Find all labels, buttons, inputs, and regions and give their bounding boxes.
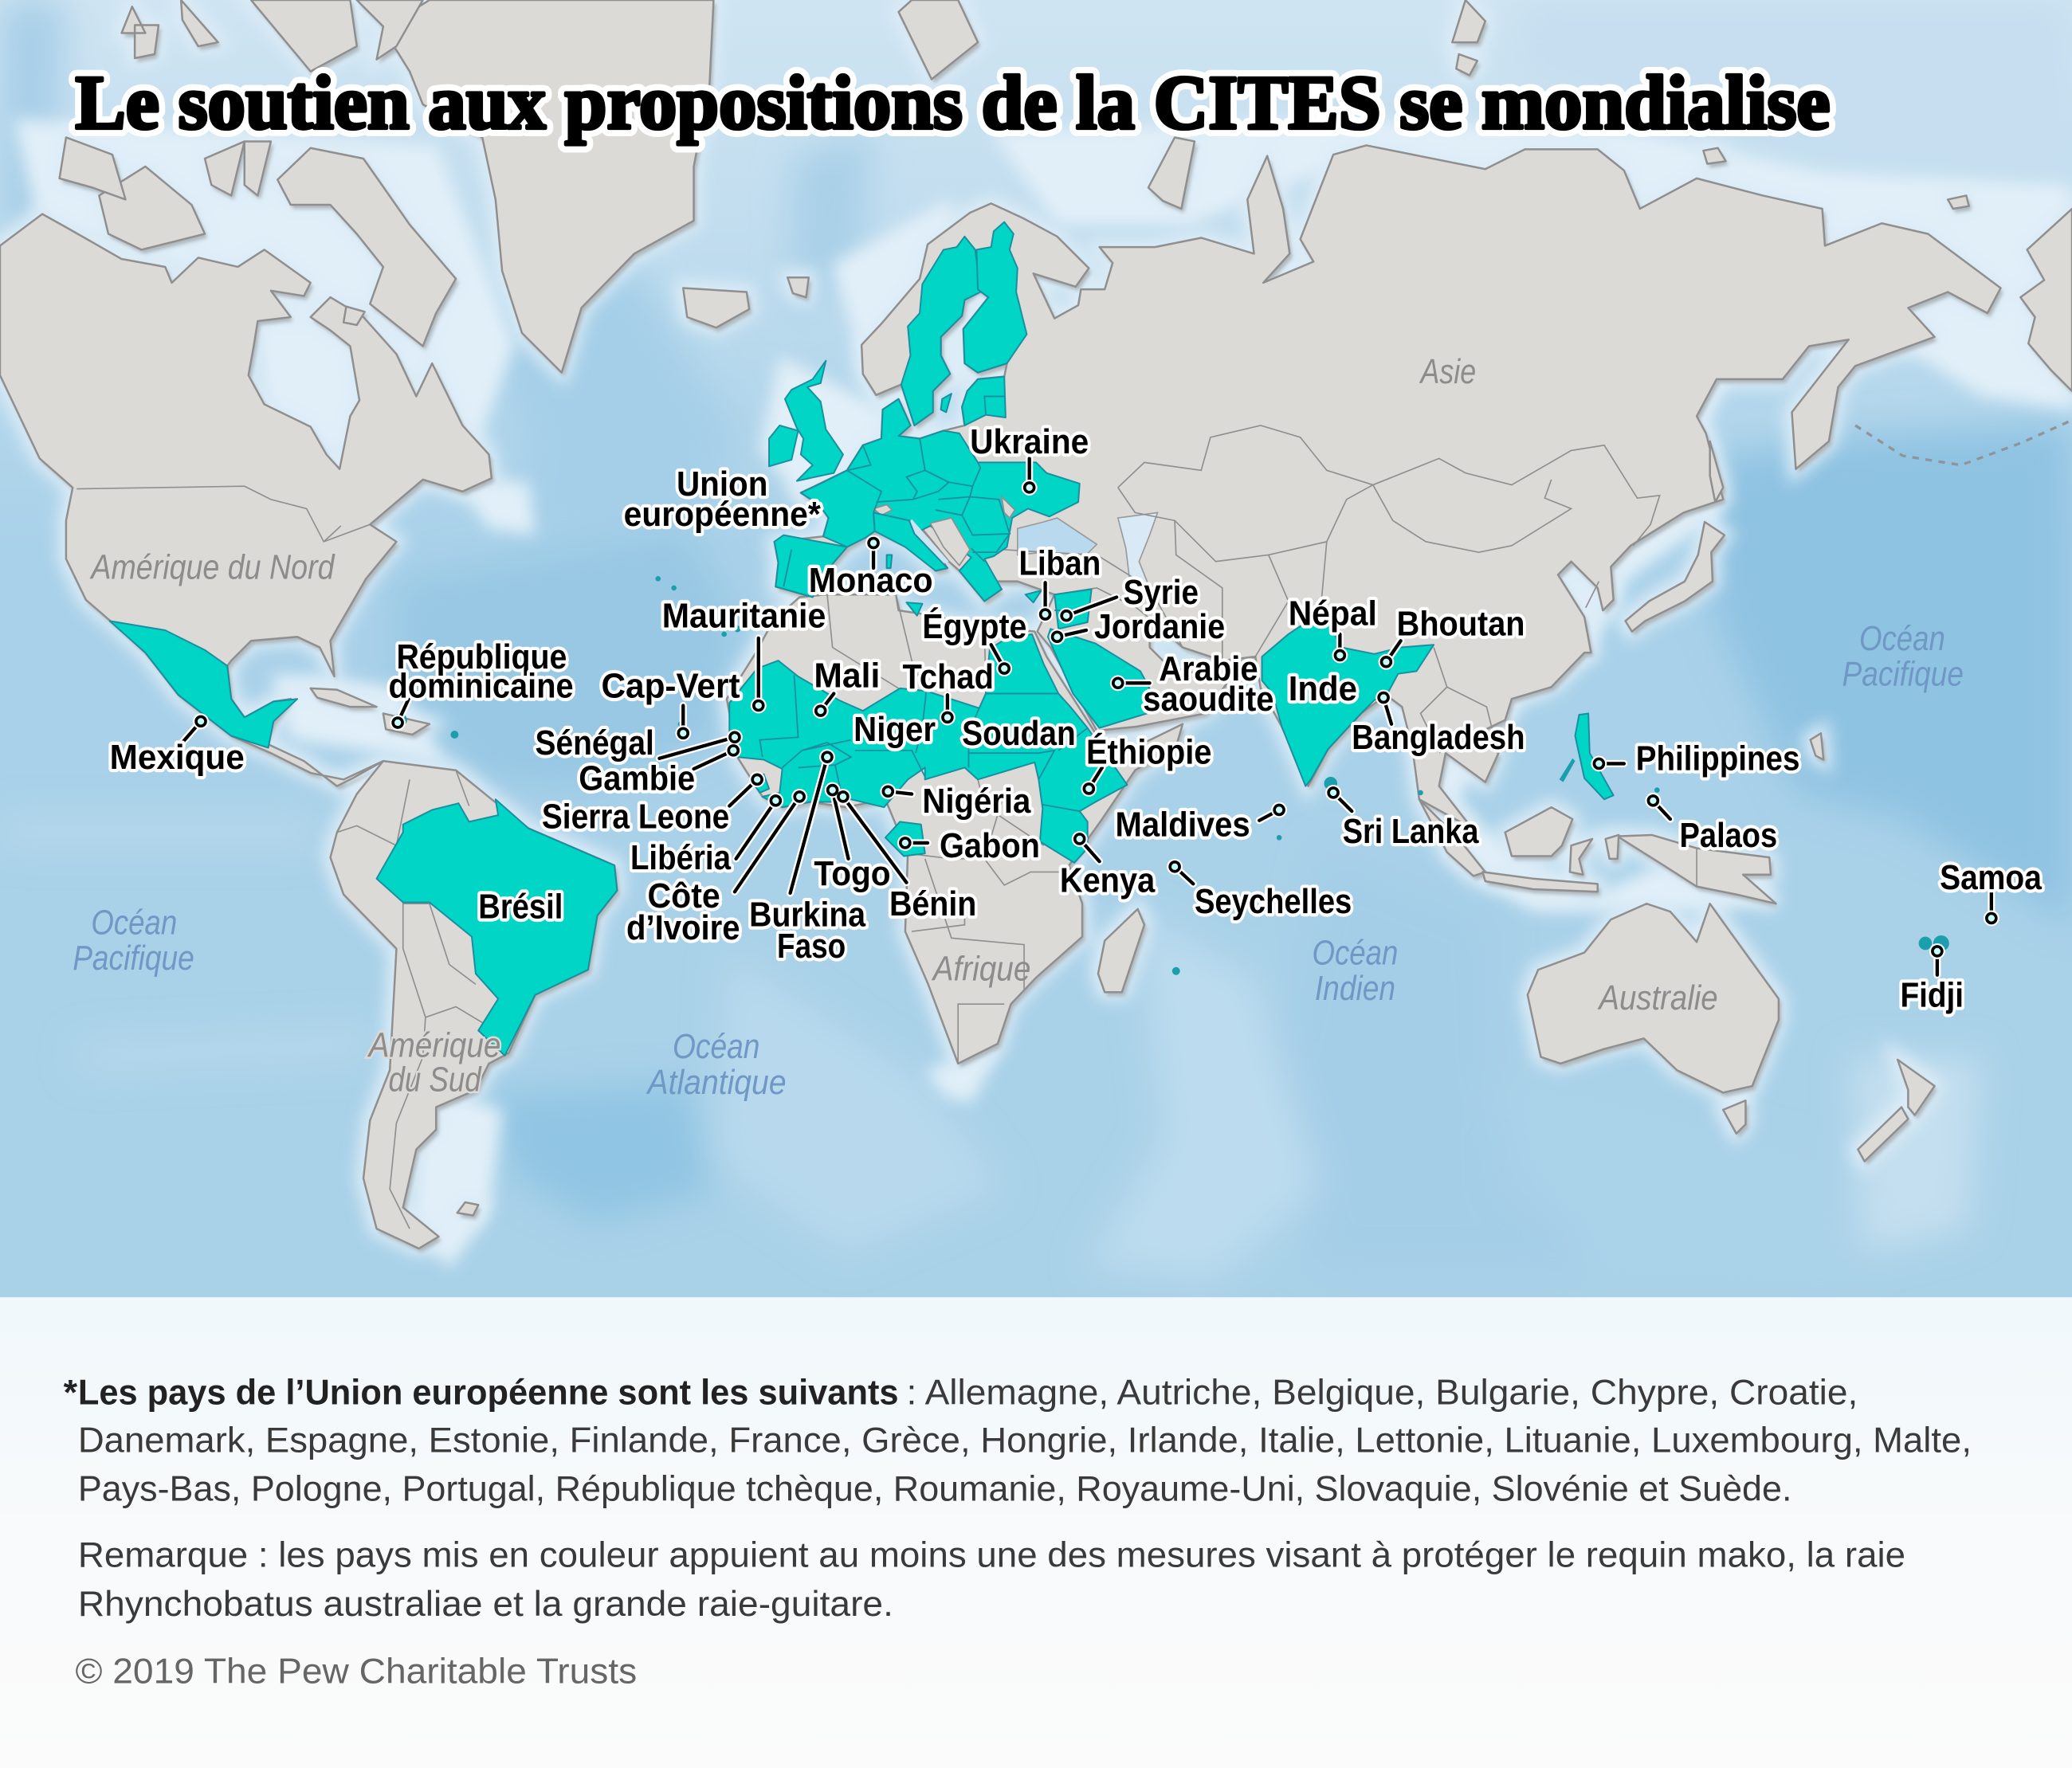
country labels: Sénégal (536, 724, 654, 762)
country labels: Sierra Leone (542, 798, 729, 837)
title: Le soutien aux propositions de la CITES se mondialise (76, 60, 1831, 145)
continent and ocean names: Asie (1419, 353, 1476, 391)
country labels: Jordanie (1094, 608, 1225, 646)
continent and ocean names: Amérique (367, 1027, 500, 1065)
footnote: EU members: Pays-Bas, Pologne, Portugal, République tchèque, Roumanie, Royaume-Uni, Slovaquie, Slovénie et Suède. (78, 1469, 1791, 1509)
footnote: EU members: : Allemagne, Autriche, Belgique, Bulgarie, Chypre, Croatie, (907, 1373, 1858, 1413)
country labels: Népal (1289, 594, 1377, 633)
country labels: Philippines (1636, 740, 1799, 778)
remark: Rhynchobatus australiae et la grande raie-guitare. (78, 1584, 893, 1624)
continent and ocean names: Amérique du Nord (89, 548, 336, 586)
land halo (0, 0, 2072, 1252)
country labels: Syrie (1123, 574, 1199, 612)
country labels: Mauritanie (662, 598, 826, 636)
continent and ocean names: Océan (1859, 620, 1945, 658)
country labels: Bangladesh (1352, 719, 1525, 757)
country labels: Tchad (903, 658, 994, 696)
country labels: Union (677, 465, 767, 504)
Europe (769, 222, 1080, 625)
continent and ocean names: Pacifique (73, 939, 194, 978)
India (1262, 621, 1434, 786)
remark: Remarque : les pays mis en couleur appuient au moins une des mesures visant à protéger le requin mako, la raie (78, 1535, 1905, 1575)
country labels: dominicaine (389, 668, 574, 706)
continent and ocean names: Pacifique (1842, 656, 1964, 694)
country labels (110, 423, 2043, 1015)
continent and ocean names: Océan (91, 904, 177, 942)
country labels: Brésil (478, 888, 563, 926)
country labels: Côte (647, 877, 720, 915)
copyright: © 2019 The Pew Charitable Trusts (76, 1652, 637, 1692)
continent and ocean names: du Sud (389, 1061, 482, 1100)
country labels: Arabie (1159, 650, 1258, 688)
country labels: Faso (777, 927, 846, 966)
Brazil (377, 799, 617, 1056)
continent and ocean names: Océan (1313, 934, 1398, 972)
highlighted countries (110, 222, 1949, 1056)
country labels: Mali (814, 657, 880, 695)
country labels: Éthiopie (1086, 733, 1212, 771)
notes panel (0, 1297, 2072, 1768)
country labels: Sri Lanka (1343, 813, 1479, 851)
country labels: Burkina (749, 896, 866, 934)
country labels: Kenya (1060, 861, 1156, 900)
country labels: Togo (814, 855, 891, 893)
map background (0, 0, 2072, 1297)
continent and ocean names: Atlantique (646, 1064, 787, 1102)
country labels: Palaos (1680, 817, 1777, 855)
continent and ocean names: Afrique (931, 950, 1030, 988)
country labels: Inde (1289, 670, 1357, 708)
country labels: République (396, 638, 567, 676)
country labels: Cap-Vert (601, 668, 740, 706)
ocean depth shading (0, 0, 2072, 1281)
continent and ocean names: Indien (1315, 970, 1395, 1008)
Mexico (110, 621, 297, 748)
land masses (0, 0, 2072, 1249)
remark (78, 1535, 1905, 1624)
country labels: Ukraine (970, 423, 1089, 461)
continent and ocean names: Australie (1597, 979, 1718, 1017)
continent and ocean names: Océan (673, 1028, 759, 1066)
country labels: Samoa (1940, 859, 2043, 897)
country labels: Fidji (1900, 977, 1964, 1015)
leader lines and pins (182, 458, 1999, 975)
country labels: Gabon (940, 827, 1040, 865)
country labels: Égypte (922, 608, 1026, 646)
country labels: Soudan (962, 715, 1076, 753)
country labels: Monaco (809, 562, 933, 600)
country labels: Liban (1018, 544, 1101, 582)
country labels: européenne* (624, 496, 821, 534)
country labels: Libéria (630, 839, 732, 877)
country labels: Gambie (579, 760, 695, 798)
continent and ocean names (73, 353, 1964, 1102)
footnote: EU members: * (64, 1373, 78, 1413)
country labels: Mexique (110, 739, 245, 777)
country labels: Bénin (889, 885, 976, 923)
Africa and Middle East (729, 590, 1152, 863)
country labels: Seychelles (1195, 883, 1352, 921)
small islands (394, 576, 1949, 975)
footnote: EU members: Danemark, Espagne, Estonie, Finlande, France, Grèce, Hongrie, Irlande, Italie, Lettonie, Lituanie, Luxembourg, Malte, (78, 1420, 1972, 1460)
country labels: Bhoutan (1397, 606, 1525, 644)
title: Le soutien aux propositions de la CITES se mondialise (76, 60, 1831, 145)
country labels: saoudite (1143, 680, 1273, 719)
Philippines (1576, 713, 1614, 799)
footnote: EU members: Les pays de l’Union européenne sont les suivants (78, 1373, 899, 1413)
country borders (77, 425, 1697, 1229)
country labels: Nigéria (922, 782, 1031, 821)
country labels: Maldives (1115, 806, 1250, 845)
footnote: EU members (64, 1373, 1972, 1509)
country labels: d’Ivoire (626, 909, 740, 947)
country labels: Niger (854, 711, 936, 749)
